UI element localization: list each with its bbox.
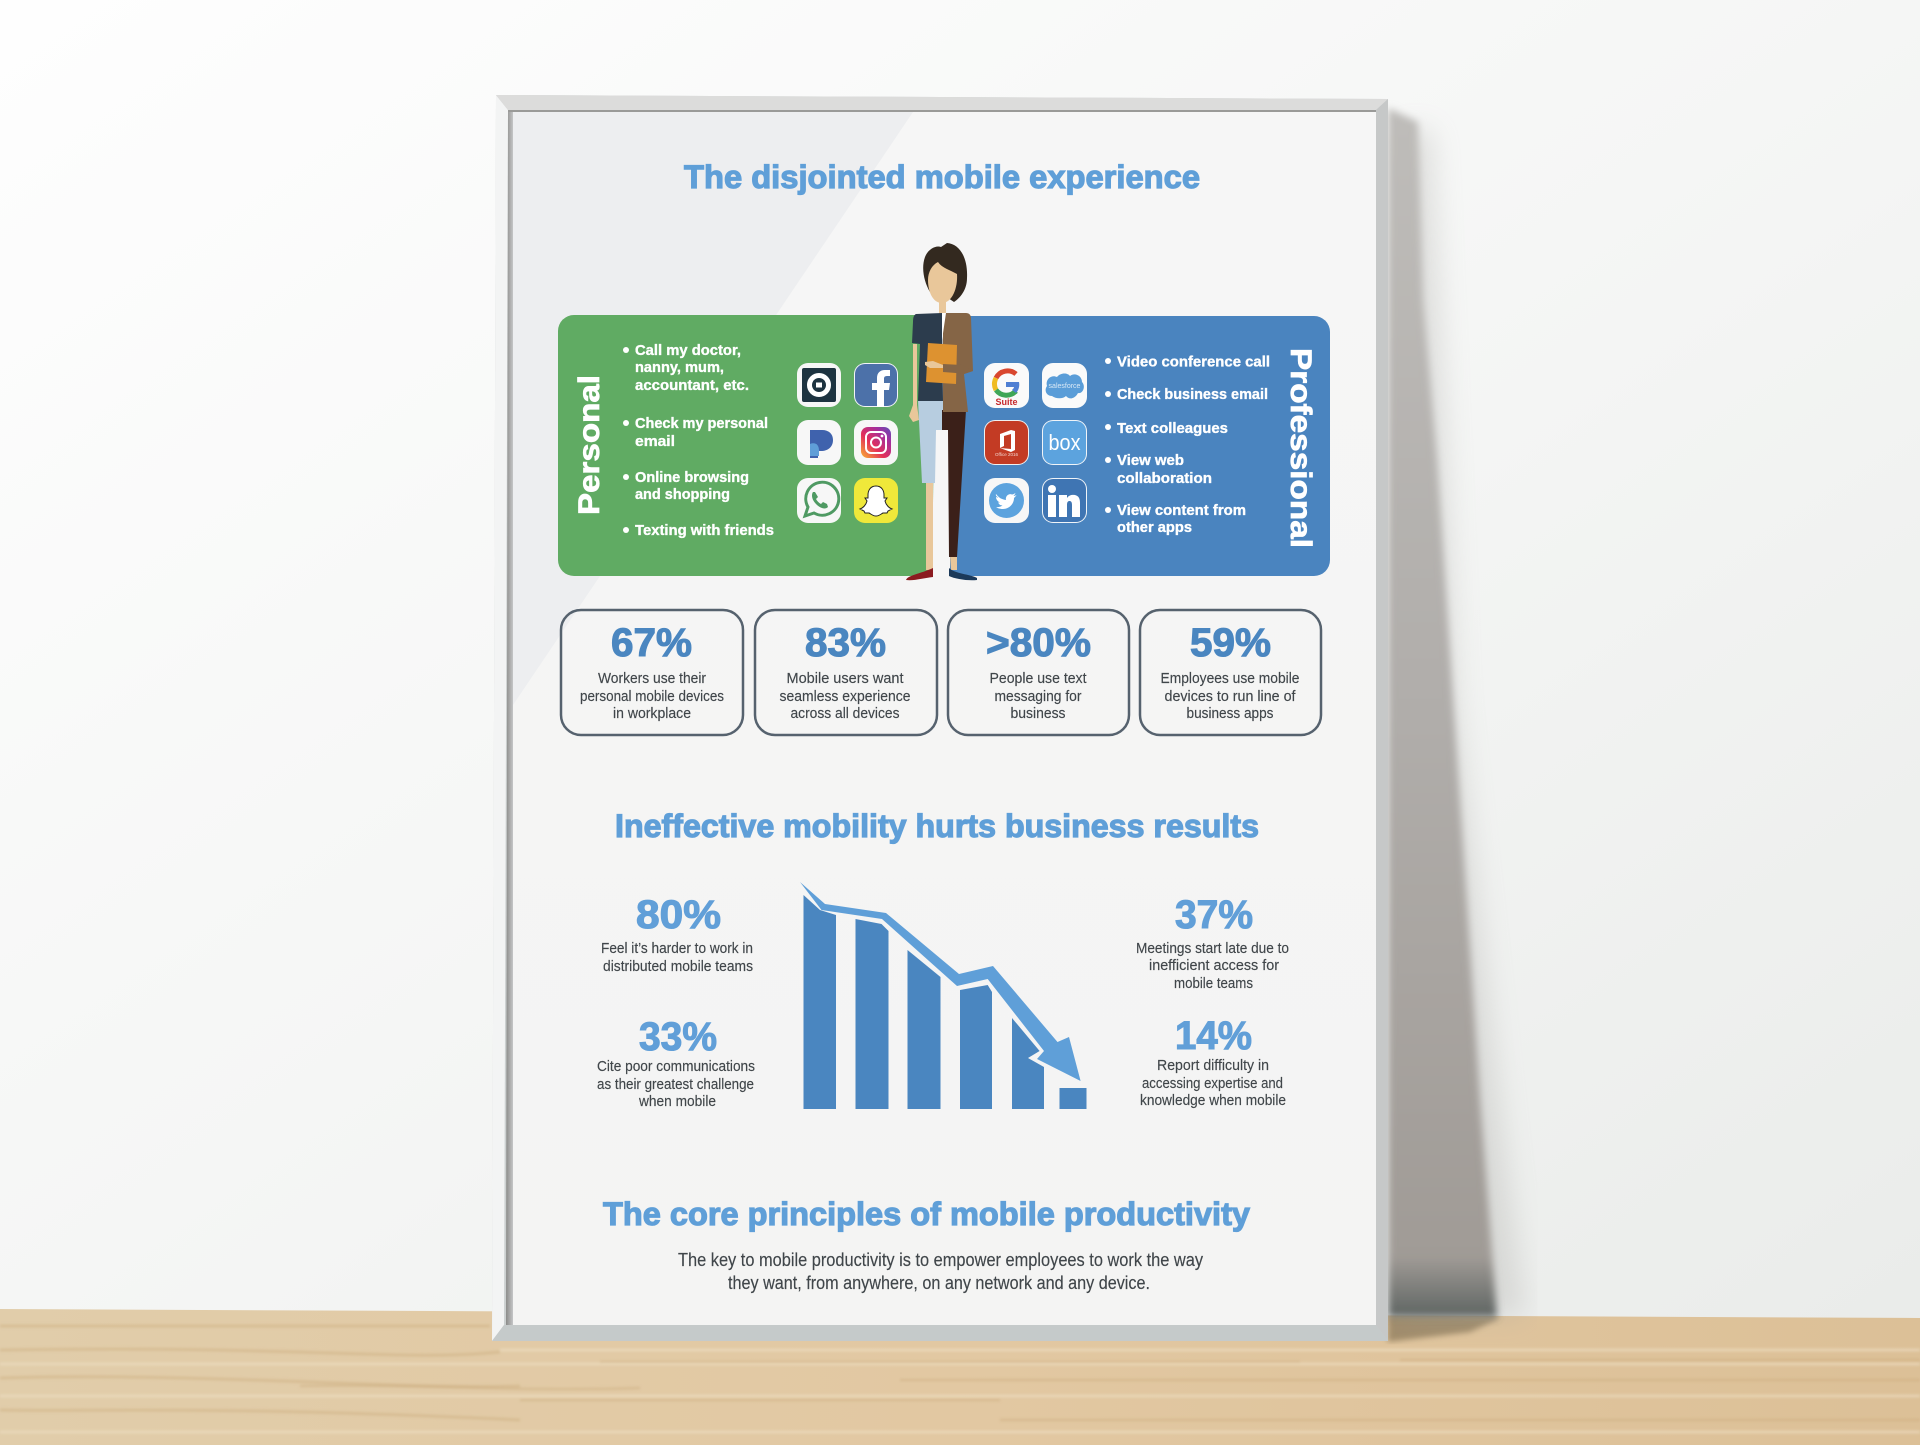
title: core principles: The core principles of mobile productivity	[603, 1196, 1250, 1232]
icon: Google Suite: Suite	[995, 397, 1018, 407]
icon: Salesforce	[1042, 363, 1087, 408]
paragraph: core principles: The key to mobile productivity is to empower employees to work the way	[678, 1250, 1203, 1270]
figure: woman standing	[906, 243, 977, 580]
list: professional activities: Text colleagues	[1117, 420, 1228, 437]
stat: 80%	[601, 893, 753, 975]
stat card: >80%	[948, 610, 1129, 735]
trousers	[942, 410, 966, 557]
neck	[939, 300, 946, 316]
stat: 37%: Meetings start late due to	[1136, 940, 1289, 957]
stat card: 83%	[755, 610, 937, 735]
wooden shelf	[0, 1309, 1920, 1445]
icon: Google Suite	[984, 363, 1029, 408]
bars	[804, 895, 1086, 1109]
stat: 33%: when mobile	[638, 1093, 716, 1110]
stat card: 59%	[1140, 610, 1321, 735]
stat card: 59%: Employees use mobile	[1160, 670, 1300, 687]
arrow	[800, 882, 1081, 1081]
list: professional activities: View content from	[1117, 502, 1246, 519]
stat: 80%: distributed mobile teams	[603, 958, 753, 975]
poster frame	[492, 95, 1388, 1341]
icon: Instagram	[854, 420, 898, 465]
paragraph: core principles: they want, from anywhere, on any network and any device.	[728, 1273, 1150, 1293]
legs	[926, 483, 933, 570]
stat card: >80%: People use text	[990, 670, 1087, 687]
stat card: 59%: devices to run line of	[1164, 688, 1296, 705]
stat: 33%: as their greatest challenge	[597, 1076, 754, 1093]
list: professional activities: collaboration	[1117, 470, 1212, 487]
stat: 33%: 33%	[639, 1015, 717, 1059]
list: personal activities: Check my personal	[635, 415, 768, 432]
stat card: 59%: 59%	[1190, 621, 1271, 665]
face	[928, 262, 957, 303]
list: personal activities: accountant, etc.	[635, 377, 749, 394]
heading: Personal: Personal	[573, 375, 606, 515]
top navy	[912, 313, 943, 401]
stat card: >80%: >80%	[986, 621, 1091, 665]
icon: Twitter	[984, 478, 1029, 523]
stat card: 83%: across all devices	[790, 705, 900, 722]
stat card: 83%: 83%	[805, 621, 886, 665]
list: personal activities	[623, 342, 774, 539]
stat card: 67%: personal mobile devices	[580, 688, 724, 705]
hair	[923, 243, 967, 302]
list: personal activities: Call my doctor,	[635, 342, 741, 359]
list: personal activities: and shopping	[635, 486, 730, 503]
list: professional activities: View web	[1117, 452, 1184, 469]
jacket	[943, 313, 973, 412]
icon: WhatsApp	[797, 478, 841, 523]
stat: 37%: mobile teams	[1174, 975, 1253, 992]
stat: 14%: accessing expertise and	[1142, 1075, 1283, 1092]
stat: 37%: 37%	[1175, 893, 1253, 937]
heading: Professional: Professional	[1284, 348, 1317, 548]
icon: Box	[1042, 420, 1087, 465]
stat card: 59%: business apps	[1186, 705, 1274, 722]
stat card: >80%: messaging for	[994, 688, 1082, 705]
list: personal activities: email	[635, 433, 675, 450]
shoes	[906, 568, 933, 580]
stat: 80%: 80%	[636, 893, 721, 937]
stat: 33%	[597, 1015, 755, 1110]
icon: Office 2016: Office 2016	[995, 452, 1018, 457]
stat: 80%: Feel it’s harder to work in	[601, 940, 753, 957]
paragraph: core principles	[678, 1250, 1203, 1293]
stat card: 67%: in workplace	[613, 705, 691, 722]
panel: professional	[950, 316, 1330, 576]
list: personal activities: nanny, mum,	[635, 359, 724, 376]
list: professional activities: other apps	[1117, 519, 1192, 536]
icon: Office 2016	[984, 420, 1029, 465]
list: professional activities: Video conference call	[1117, 354, 1270, 370]
stat card: 83%: Mobile users want	[786, 670, 904, 687]
icon: Snapchat	[854, 478, 898, 523]
stat card: 67%: 67%	[611, 621, 692, 665]
frame shadow halo on wall	[1400, 130, 1525, 1317]
folder	[926, 343, 957, 384]
shorts	[918, 400, 943, 483]
title: disjointed mobile experience: The disjointed mobile experience	[684, 159, 1200, 195]
stat: 14%: 14%	[1175, 1014, 1252, 1058]
chart: declining bars with arrow	[800, 882, 1086, 1109]
stat card: 83%: seamless experience	[780, 688, 910, 705]
stat: 37%	[1136, 893, 1289, 992]
icon: Uber	[797, 363, 841, 407]
icon: Box: box	[1048, 430, 1080, 455]
icon: Facebook	[854, 363, 898, 407]
stat: 14%: Report difficulty in	[1157, 1057, 1269, 1074]
stat card: 67%	[561, 610, 743, 735]
icon: PayPal	[797, 420, 841, 465]
list: professional activities	[1105, 354, 1270, 536]
list: personal activities: Online browsing	[635, 469, 749, 486]
panel: personal	[558, 315, 928, 576]
list: professional activities: Check business email	[1117, 386, 1268, 403]
list: personal activities: Texting with friends	[635, 522, 774, 539]
icon: LinkedIn	[1042, 478, 1087, 523]
stat: 33%: Cite poor communications	[597, 1058, 755, 1075]
stat: 14%	[1140, 1014, 1286, 1109]
stat: 14%: knowledge when mobile	[1140, 1092, 1286, 1109]
icon: Salesforce: salesforce	[1049, 383, 1081, 390]
hand	[925, 361, 943, 368]
stat card: 67%: Workers use their	[598, 670, 706, 687]
frame shadow on wall	[1388, 108, 1497, 1317]
arm	[909, 344, 919, 422]
stat card: >80%: business	[1010, 705, 1066, 722]
forearm	[943, 364, 973, 374]
stat: 37%: inefficient access for	[1149, 957, 1279, 974]
title: ineffective mobility: Ineffective mobility hurts business results	[615, 808, 1259, 844]
